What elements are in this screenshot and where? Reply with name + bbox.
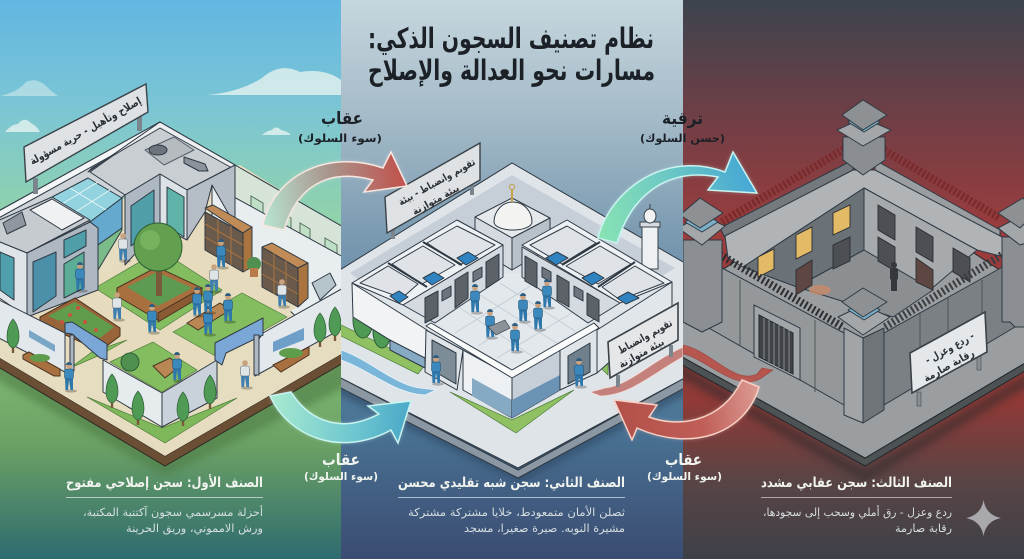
dark cell windows: [796, 205, 970, 295]
arrow: promotion top right: [598, 152, 757, 243]
lawns: [335, 322, 608, 433]
sign: correction 2: بيئة متوازنة: [617, 336, 666, 371]
watchtower: left: [678, 198, 725, 332]
garden planter and tree: [117, 223, 202, 322]
title: مسارات نحو العدالة والإصلاح: [368, 54, 655, 87]
plot base: [675, 180, 1024, 482]
inner arrow: red path: [683, 345, 773, 382]
inner arrow: red path: [590, 347, 683, 396]
text block: category two: [398, 475, 625, 535]
label: promotion top right: [640, 109, 725, 145]
inner arrow: blue path: [341, 350, 436, 395]
watchtower: front: [838, 288, 890, 423]
back walls: [720, 160, 1008, 267]
text block: category three: ردع وعزل - رق أملي وسحب إلى سجودها،: [763, 505, 952, 519]
small table and bush: [121, 353, 180, 378]
sign: reform: إصلاح وتأهيل - حرية مسؤولة: [27, 93, 143, 168]
people in courtyard: [76, 233, 290, 383]
title: نظام تصنيف السجون الذكي:: [368, 22, 654, 55]
guard in yard: [890, 262, 898, 291]
panel: red background: [683, 0, 1024, 559]
yard light patch: [809, 285, 831, 295]
front walls with gates: [0, 287, 345, 427]
front walls: [707, 260, 1015, 405]
label: punishment bottom right: (سوء السلوك): [647, 471, 722, 483]
text block: category three: رقابة صارمة: [895, 522, 952, 535]
text block: category two: الصنف الثاني: سجن شبه تقليدي محسن: [398, 475, 625, 491]
outer lawn: [87, 397, 237, 443]
arrow: punishment bottom left: [270, 392, 411, 443]
clouds: [0, 68, 341, 135]
text block: category three: [761, 475, 952, 535]
building: long rear roof: [0, 122, 235, 236]
sign: correction 1: تقويم وانضباط - بيئة: [397, 157, 478, 208]
guards in yard: [470, 279, 555, 354]
sign: deterrence: [910, 312, 987, 406]
building: right block: [88, 122, 235, 265]
plot base: [330, 163, 690, 482]
plot base: [0, 165, 350, 476]
back razor wire: [722, 148, 1000, 222]
lawns: [70, 250, 287, 392]
bookshelves: [205, 205, 336, 307]
sign: deterrence: رقابة صارمة: [922, 347, 976, 385]
cypress trees: [7, 307, 341, 426]
minaret: [640, 204, 660, 269]
illustration: open reform prison: [0, 84, 350, 476]
label: promotion top right: (حسن السلوك): [640, 132, 725, 145]
text block: category two: مشيرة النوبه. صيرة صغيرا، مسجد: [464, 522, 625, 535]
potted plant: [247, 257, 261, 277]
illustration: strict punitive prison: [675, 100, 1024, 482]
title: [368, 22, 655, 87]
arrow: punishment top left: [263, 152, 407, 230]
arrow: punishment bottom right: [614, 380, 759, 440]
front walls and gates: [425, 282, 672, 418]
trees by front wall: [352, 317, 390, 348]
building: glass atrium: [52, 178, 122, 270]
courtyard floor: [212, 215, 297, 312]
watchtower: back: [837, 100, 891, 175]
label: punishment bottom right: [647, 450, 722, 483]
text block: category one: ورش الامموني، وريق الحرينة: [126, 522, 263, 536]
text block: category three: الصنف الثالث: سجن عقابي مشدد: [761, 475, 952, 491]
sign: correction 2: [608, 303, 678, 387]
label: punishment bottom left: [304, 450, 378, 483]
front razor wire: [712, 250, 1010, 327]
illustration: semi-traditional prison: [330, 143, 690, 482]
label: punishment top left: [298, 109, 382, 145]
label: promotion top right: ترقية: [662, 109, 703, 129]
text block: category one: أحزلة مسرسمي سجون آكتتبة المكتبة،: [83, 505, 263, 519]
left cell block: [352, 220, 503, 368]
label: punishment bottom left: (سوء السلوك): [304, 471, 378, 483]
meeting table: [187, 284, 236, 337]
main gate: [754, 305, 800, 380]
label: punishment top left: (سوء السلوك): [298, 132, 382, 145]
watchtower: right: [998, 198, 1024, 327]
sign: correction 1: بيئة متوازنة: [411, 183, 461, 218]
guards at gates: [432, 355, 587, 389]
panel: blue background: [341, 0, 683, 559]
prison yard floor: [455, 282, 575, 358]
right cell block: [522, 220, 672, 323]
sign posts: [33, 115, 142, 194]
label: punishment top left: عقاب: [321, 109, 363, 129]
sign: correction 2: تقويم وانضباط: [616, 317, 674, 357]
back fence wall: [236, 164, 341, 255]
text block: category one: الصنف الأول: سجن إصلاحي مفتوح: [66, 474, 263, 491]
building: left block: [0, 197, 98, 317]
sign: correction 1: [385, 143, 480, 239]
text block: category one: [66, 474, 263, 536]
outer planters: [23, 347, 309, 376]
sign: deterrence: - ردع وعزل -: [923, 330, 976, 367]
label: punishment bottom left: عقاب: [322, 450, 360, 469]
panel: green background: [0, 0, 341, 559]
mosque: [475, 184, 550, 270]
text block: category two: ثصلن الأمان متمعودط، خلايا مشتركة مشتركة: [408, 505, 625, 519]
inner white wall: [212, 185, 345, 320]
inner courtyard: [743, 188, 977, 317]
people at gates: [64, 360, 253, 393]
icon: sparkle star: [966, 500, 1001, 536]
vegetable bed: [40, 298, 120, 351]
label: punishment bottom right: عقاب: [665, 450, 702, 469]
lit cell windows: [758, 205, 850, 277]
